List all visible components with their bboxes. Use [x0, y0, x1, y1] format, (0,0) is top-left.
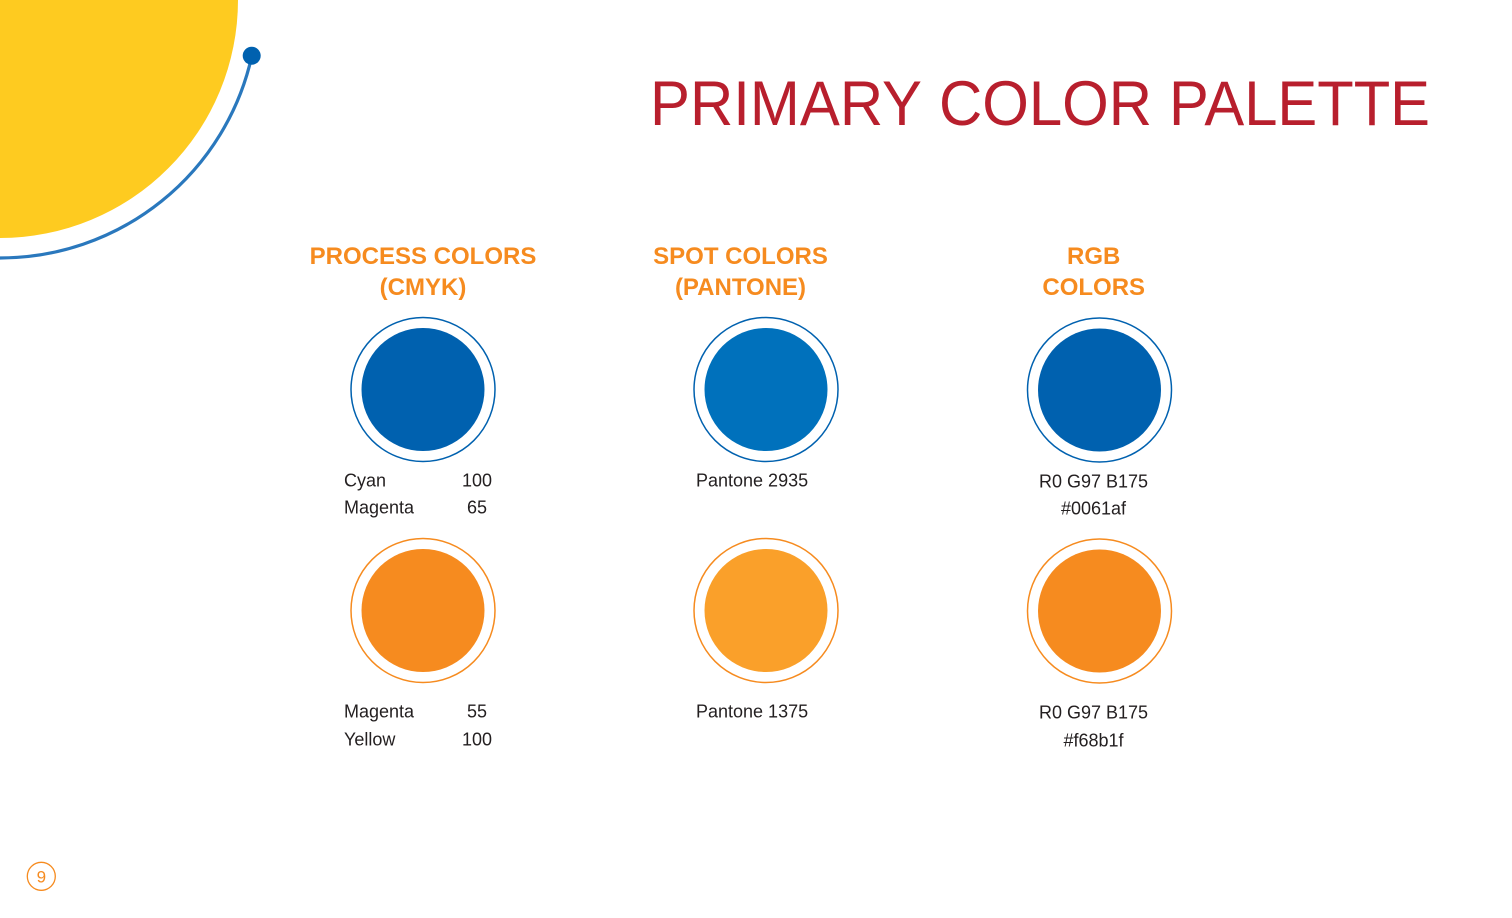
swatch: CMYK blue [351, 318, 495, 462]
RGB orange values: R0 G97 B175 [1039, 703, 1148, 723]
column heading: process colors: (CMYK) [380, 274, 466, 301]
title: COLOR [939, 69, 1152, 139]
CMYK orange values: 55 [467, 702, 487, 722]
CMYK blue values: Magenta [344, 498, 415, 518]
RGB blue values: R0 G97 B175 [1039, 472, 1148, 492]
column heading: spot colors: (PANTONE) [675, 274, 806, 301]
title [650, 69, 1430, 139]
CMYK orange values: Yellow [344, 730, 396, 750]
swatch: Pantone 1375 [694, 538, 838, 682]
page number [27, 862, 55, 890]
CMYK orange values: 100 [462, 730, 492, 750]
CMYK blue values [344, 471, 492, 518]
CMYK blue values: Cyan [344, 471, 386, 491]
CMYK blue values: 65 [467, 498, 487, 518]
page number: 9 [37, 868, 46, 886]
title: PRIMARY [650, 69, 922, 139]
CMYK orange values [344, 702, 492, 750]
CMYK blue values: 100 [462, 471, 492, 491]
decorative blue arc with dot [0, 47, 261, 258]
swatch: RGB orange [1028, 539, 1172, 683]
swatch: CMYK orange [351, 538, 495, 682]
decorative yellow quarter circle [0, 0, 238, 238]
CMYK orange values: Magenta [344, 702, 415, 722]
column heading: rgb colors: RGB [1067, 243, 1120, 270]
Pantone orange label: Pantone 1375 [696, 702, 808, 722]
column heading: spot colors: SPOT COLORS [653, 243, 828, 270]
RGB orange values: #f68b1f [1063, 731, 1125, 751]
column heading: rgb colors: COLORS [1042, 274, 1145, 301]
swatch: Pantone 2935 [694, 318, 838, 462]
title: PALETTE [1169, 69, 1430, 139]
Pantone blue label: Pantone 2935 [696, 471, 808, 491]
column heading: process colors: PROCESS COLORS [310, 243, 536, 270]
RGB blue values: #0061af [1061, 498, 1127, 518]
swatch: RGB blue [1028, 318, 1172, 462]
